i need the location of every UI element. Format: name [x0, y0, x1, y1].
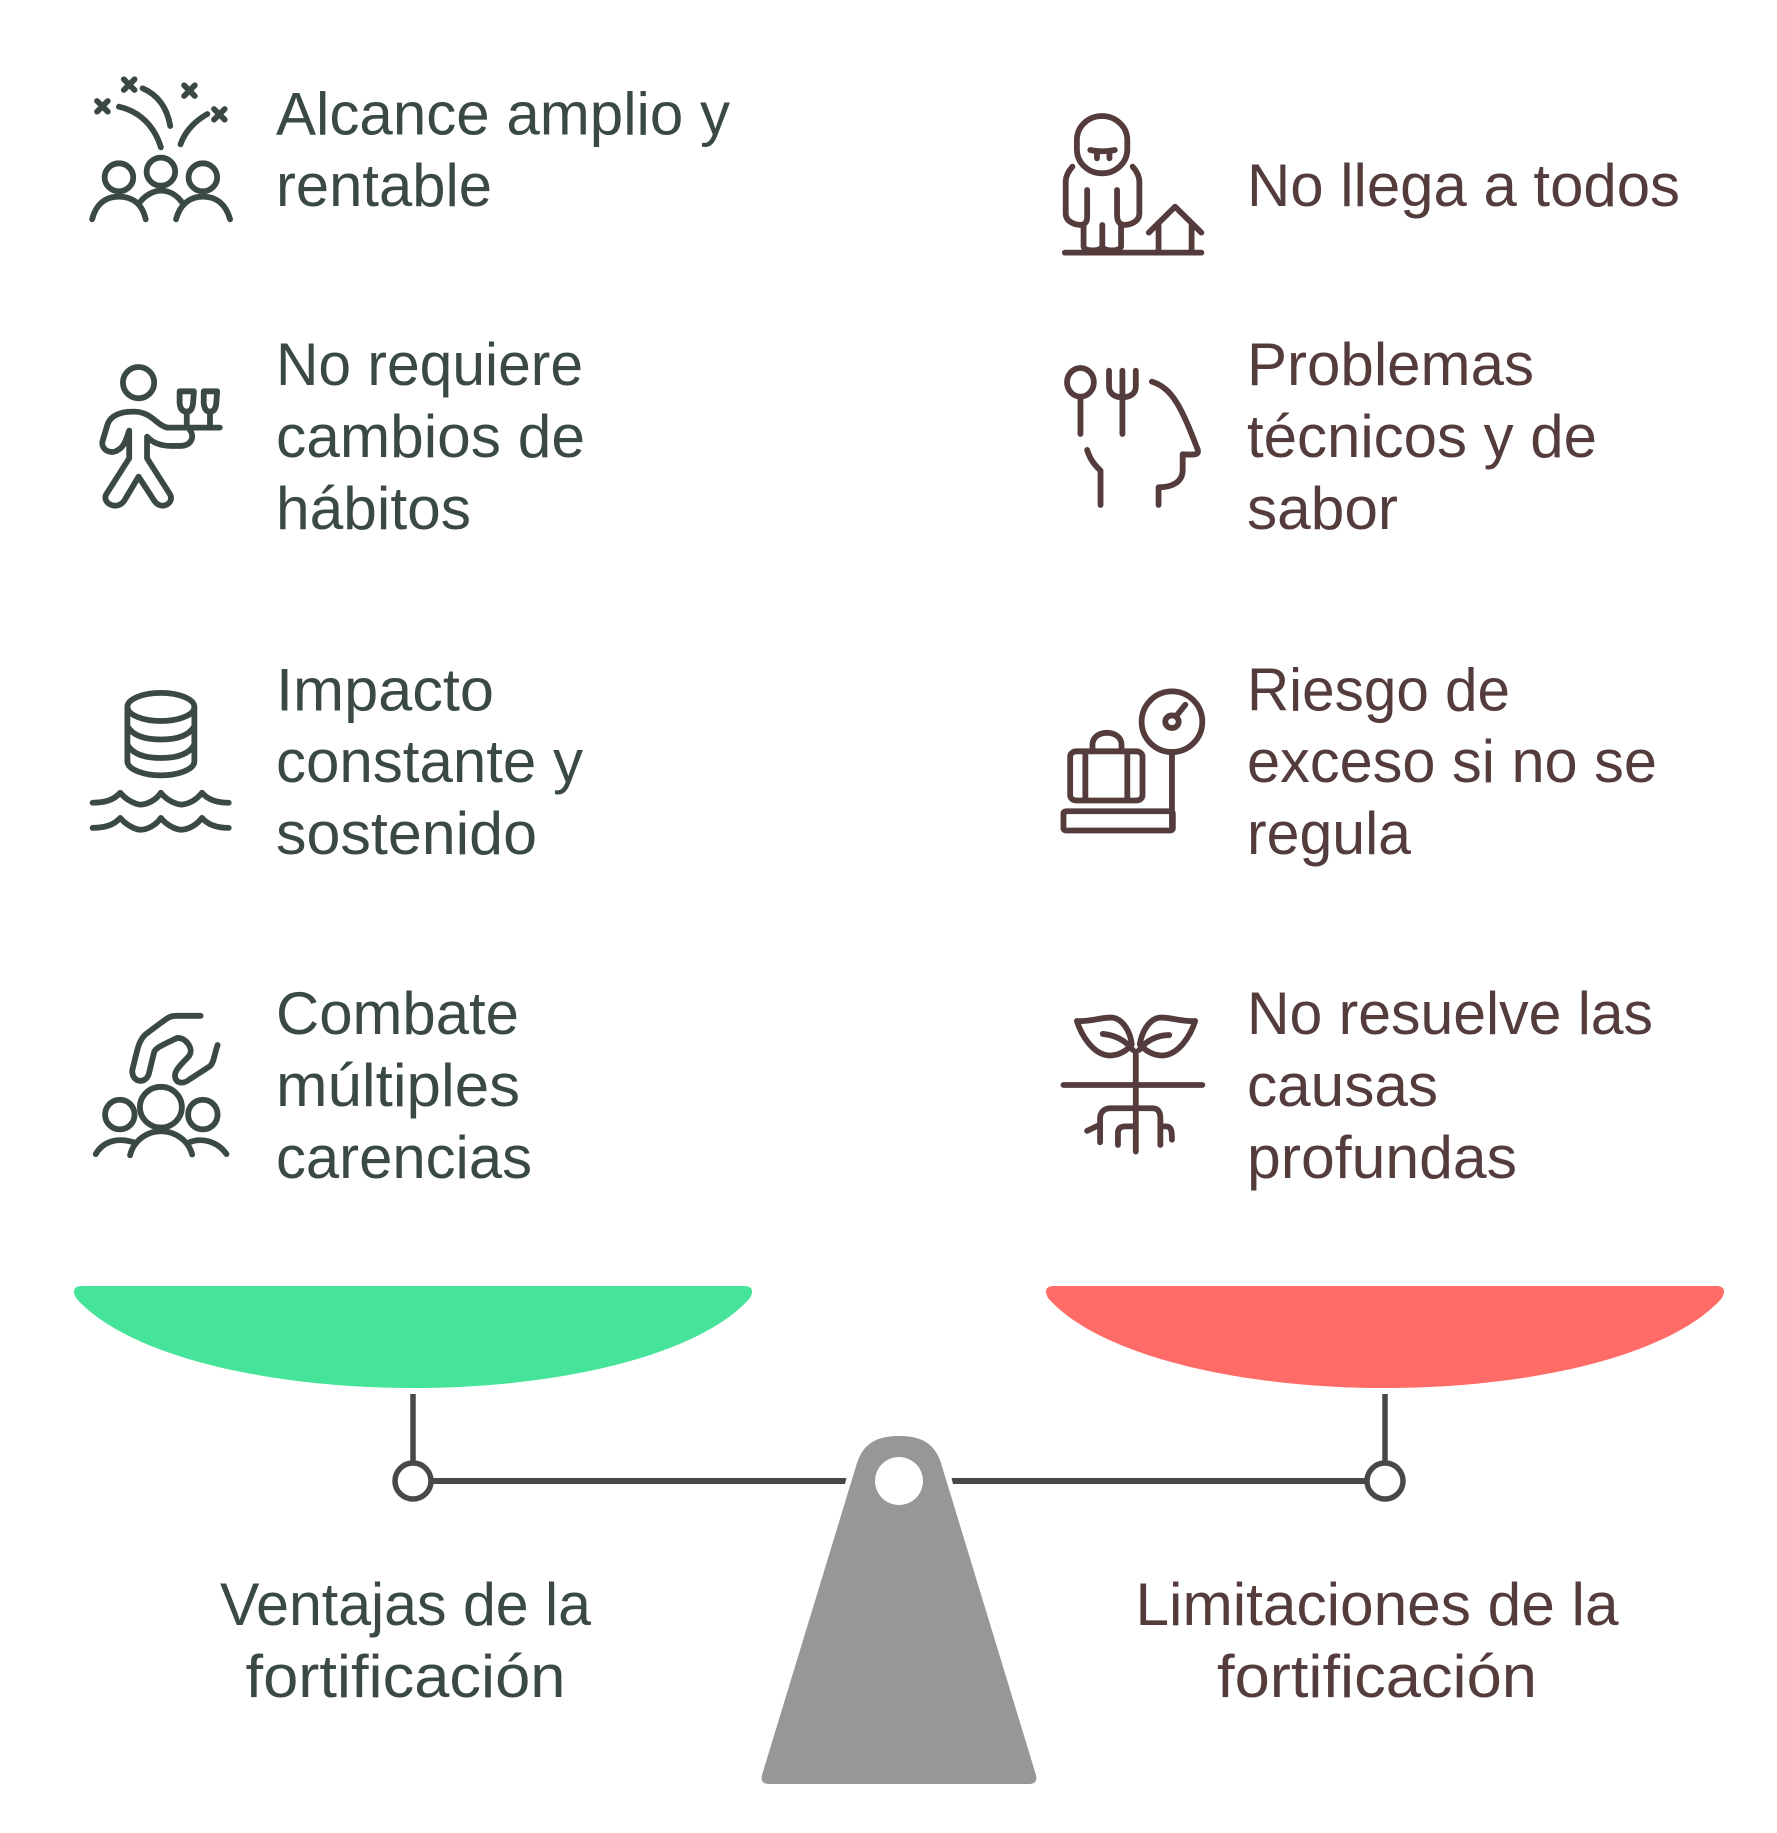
text: Riesgo de exceso si no se regula: regula [1247, 800, 1412, 867]
left stem and beam [395, 1394, 846, 1499]
advantage 4: fights multiple deficiencies [96, 980, 532, 1191]
green pan [74, 1286, 752, 1388]
panel: limitations list [1063, 116, 1680, 1191]
advantage 1: wide and cost-effective reach [92, 79, 730, 219]
balance scale [74, 1286, 1724, 1784]
limitation 2: technical and taste problems [1067, 331, 1597, 542]
advantage 2: no habit changes [102, 331, 585, 542]
right stem and beam [952, 1394, 1403, 1499]
text: No requiere cambios de hábitos [276, 331, 585, 542]
icon: crowd with fireworks [92, 79, 230, 219]
label: Limitaciones de la fortificación: Limitaciones de la [1136, 1571, 1619, 1638]
icon: sprout with roots [1063, 1018, 1202, 1152]
label: Ventajas de la fortificación: Ventajas de la [220, 1571, 592, 1638]
text: Combate múltiples carencias: carencias [276, 1124, 532, 1191]
limitation 3: risk of excess if unregulated [1063, 656, 1657, 867]
text: Riesgo de exceso si no se regula [1247, 656, 1657, 867]
text: Problemas técnicos y de sabor: sabor [1247, 475, 1398, 542]
text: Combate múltiples carencias: múltiples [276, 1052, 520, 1119]
limitation 1: does not reach everyone [1065, 116, 1680, 253]
text: Impacto constante y sostenido: Impacto [276, 656, 494, 724]
text: Problemas técnicos y de sabor: técnicos y de [1247, 403, 1597, 470]
text: Impacto constante y sostenido: sostenido [276, 800, 537, 867]
text: No requiere cambios de hábitos: hábitos [276, 475, 471, 542]
text: Impacto constante y sostenido: constante y [276, 728, 583, 795]
text: Riesgo de exceso si no se regula: exceso si no se [1247, 728, 1657, 795]
text: Impacto constante y sostenido [276, 656, 583, 867]
label: Limitaciones de la fortificación: fortificación [1217, 1643, 1537, 1710]
text: No resuelve las causas profundas [1247, 980, 1653, 1191]
text: No resuelve las causas profundas: profundas [1247, 1124, 1517, 1191]
fulcrum [762, 1436, 1036, 1784]
label: Ventajas de la fortificación [220, 1571, 592, 1710]
text: Problemas técnicos y de sabor [1247, 331, 1597, 542]
text: Alcance amplio y rentable: Alcance amplio y [276, 80, 730, 148]
text: No requiere cambios de hábitos: cambios de [276, 403, 585, 470]
icon: stacked cylinder over water waves [93, 693, 229, 830]
text: No llega a todos: No llega a todos [1247, 152, 1680, 219]
text: Alcance amplio y rentable [276, 80, 730, 219]
text: Riesgo de exceso si no se regula: Riesgo de [1247, 656, 1510, 724]
panel: advantages list [92, 79, 730, 1191]
icon: waiter with glasses on tray [102, 367, 220, 506]
icon: hand over three people [96, 1016, 227, 1155]
text: No resuelve las causas profundas: causas [1247, 1052, 1438, 1119]
text: Alcance amplio y rentable: rentable [276, 152, 492, 219]
red pan [1046, 1286, 1724, 1388]
text: Problemas técnicos y de sabor: Problemas [1247, 331, 1534, 398]
text: No requiere cambios de hábitos: No requiere [276, 331, 583, 398]
label: Limitaciones de la fortificación [1136, 1571, 1619, 1710]
label: Ventajas de la fortificación: fortificación [246, 1643, 566, 1710]
icon: person beside a house [1065, 116, 1201, 253]
limitation 4: does not solve root causes [1063, 980, 1653, 1191]
icon: suitcase on a weighing scale [1063, 691, 1202, 830]
text: Combate múltiples carencias [276, 980, 532, 1191]
text: Combate múltiples carencias: Combate [276, 980, 519, 1047]
icon: spoon, fork and head profile [1067, 368, 1198, 505]
advantage 3: constant and sustained impact [93, 656, 583, 867]
text: No resuelve las causas profundas: No resuelve las [1247, 980, 1653, 1047]
